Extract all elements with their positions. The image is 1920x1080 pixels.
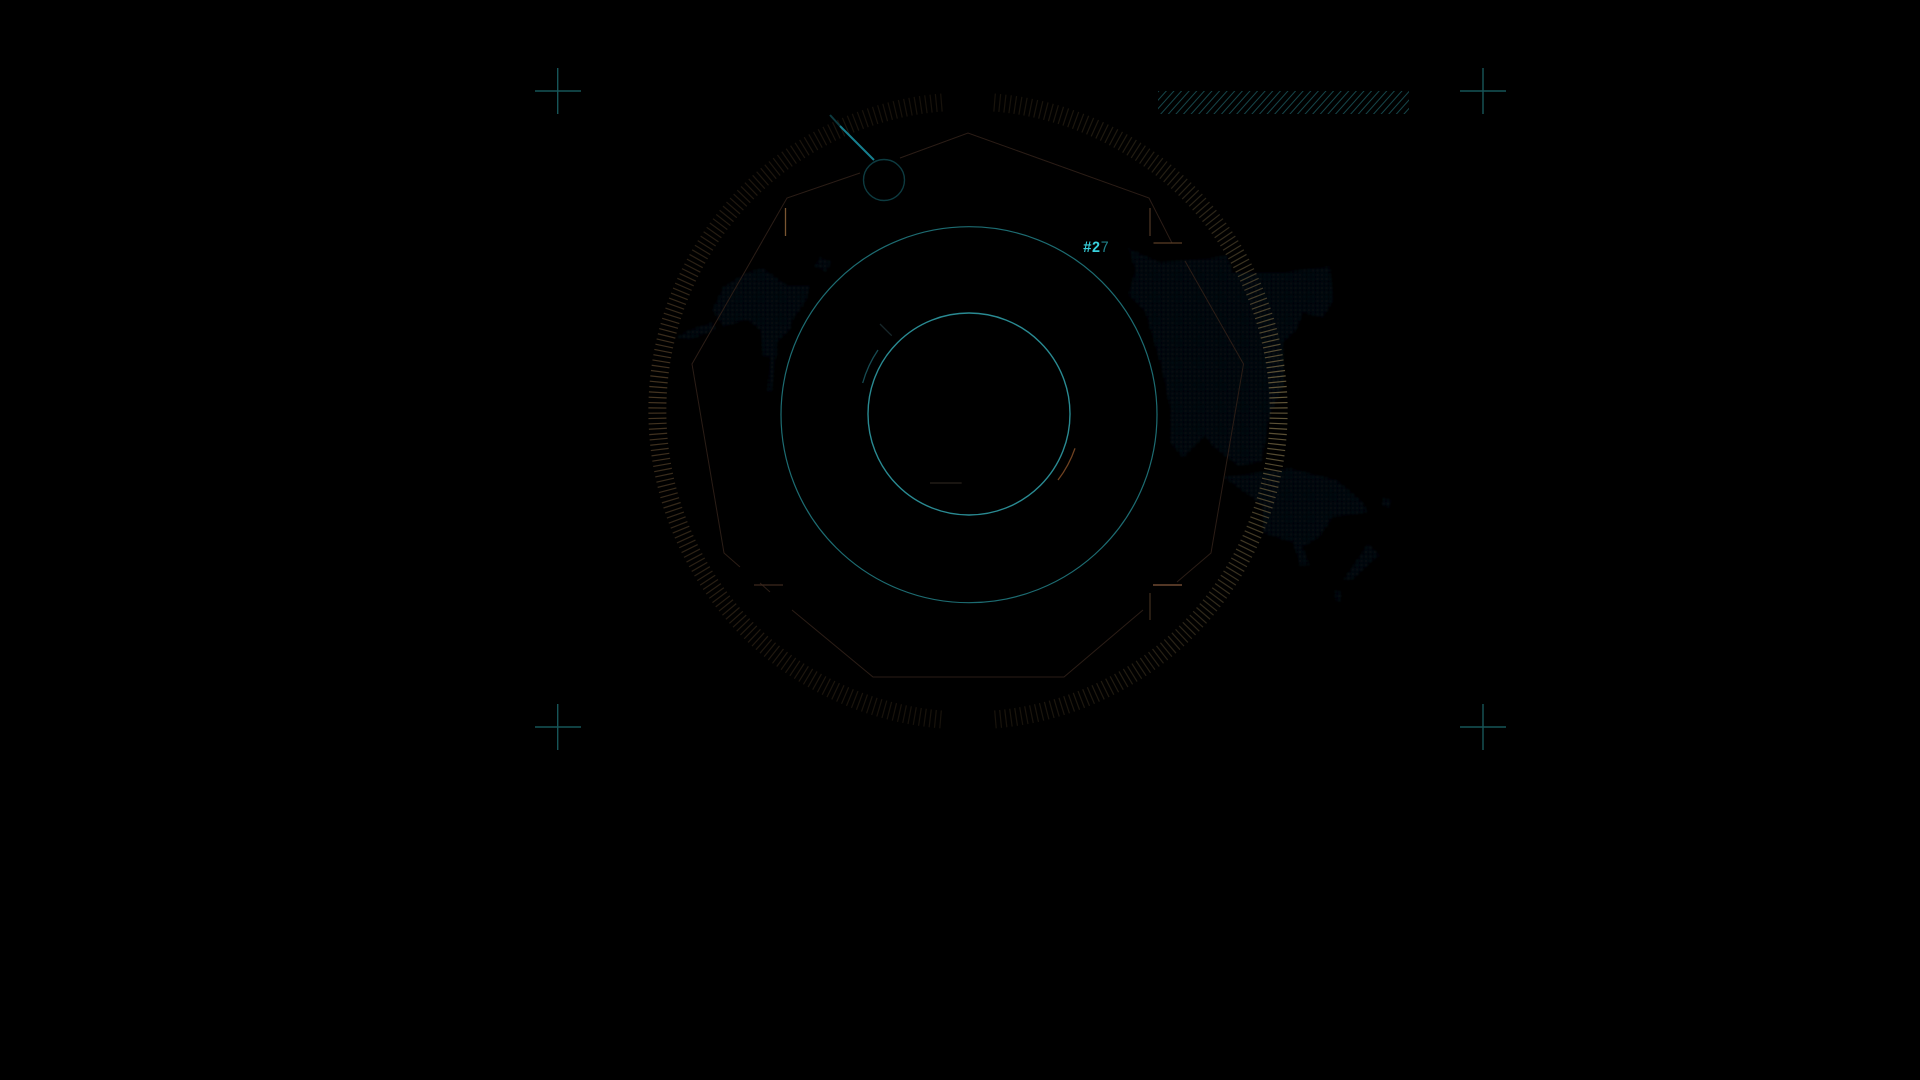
ring: left arc (657, 102, 942, 720)
mark: lower right horizontal (1153, 584, 1182, 586)
pointer line dim (830, 115, 840, 126)
dotted world map (676, 248, 1392, 602)
mark: upper right vertical (1149, 208, 1151, 236)
teal arc (863, 350, 878, 383)
ring: right arc (994, 102, 1279, 720)
map: south-east landmass (1223, 468, 1368, 566)
crosshair: bottom left (535, 704, 581, 750)
mark: lower left (754, 584, 783, 586)
HUD graphic (535, 68, 1506, 750)
outer tick ring (657, 102, 1279, 720)
crosshair: top left (535, 68, 581, 114)
orange arc (1058, 448, 1075, 480)
pointer line bright (840, 126, 874, 160)
crosshair: bottom right (1460, 704, 1506, 750)
short line (930, 482, 962, 484)
knob circle and pointer (830, 115, 904, 200)
map: main landmass (1128, 248, 1334, 466)
mark: lower right vertical (1149, 593, 1151, 620)
map: left continent (712, 268, 810, 358)
map: upper-left fragments (676, 257, 832, 392)
crosshairs (535, 68, 1506, 750)
inner accents (863, 324, 1075, 483)
knob (864, 160, 904, 200)
polygon: outline segments (692, 133, 1244, 677)
crosshair: top right (1460, 68, 1506, 114)
middle circle (781, 227, 1157, 603)
mark: upper right horizontal (1154, 242, 1182, 244)
mark: upper left (784, 208, 786, 236)
faint tick (880, 324, 892, 336)
polygon frame (692, 133, 1244, 677)
inner circle (868, 313, 1070, 515)
map: island group (1335, 498, 1392, 602)
hatched bar (1158, 91, 1409, 114)
label: #27: #27 (1083, 239, 1109, 257)
corner marks (754, 208, 1182, 620)
